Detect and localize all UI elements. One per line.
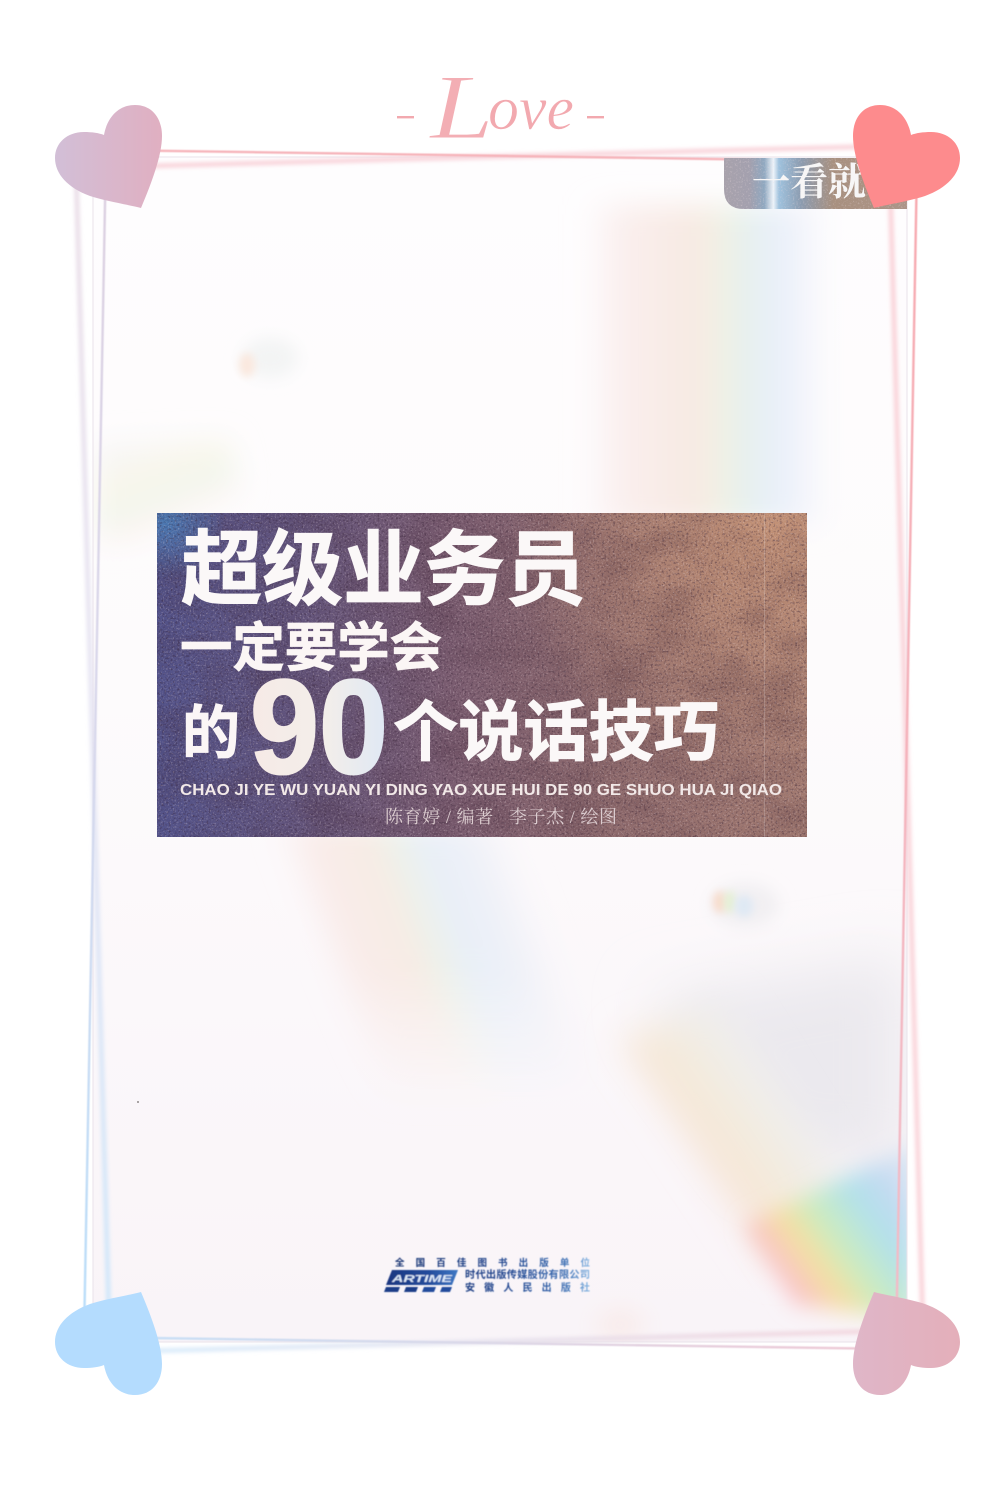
icon: heart bottom right <box>853 1292 960 1395</box>
authors: 陈育婷 / 编著 李子杰 / 绘图 <box>385 807 617 827</box>
blurred tilted frame <box>76 146 923 1352</box>
icon: heart top right <box>853 105 960 208</box>
corner tab: fragment of cover text <box>724 158 907 209</box>
heading: Love <box>397 56 604 158</box>
heading: Love: ove <box>488 75 574 143</box>
cover title background <box>157 513 807 837</box>
publisher name 2: 安徽人民出版社 <box>465 1281 590 1294</box>
publisher slogan: 全国百佳图书出版单位 <box>395 1257 590 1269</box>
publisher logo: ARTIME <box>390 1274 453 1285</box>
icon: heart bottom left <box>55 1292 162 1395</box>
publisher name 1: 时代出版传媒股份有限公司 <box>465 1268 590 1281</box>
title line 3: 的 <box>182 701 240 766</box>
book title block <box>157 513 807 837</box>
title line 3: 90 <box>250 653 388 802</box>
frosted panel with rainbow light <box>93 157 915 1342</box>
publisher mark <box>384 1257 590 1294</box>
publisher logo <box>384 1270 458 1292</box>
corner tab: fragment of cover text: 一看就 <box>752 162 866 204</box>
solid tilted frame <box>84 150 917 1349</box>
title line 3: 个说话技巧 <box>393 695 719 769</box>
panel thin outline <box>93 157 907 1342</box>
icon: heart top left <box>55 105 162 208</box>
title line 3 <box>182 653 719 802</box>
pinyin line: CHAO JI YE WU YUAN YI DING YAO XUE HUI DE 90 GE SHUO HUA JI QIAO <box>180 782 782 799</box>
title line 2: 一定要学会 <box>180 619 442 678</box>
heading: Love: L <box>427 56 494 158</box>
title line 1: 超级业务员 <box>181 525 586 616</box>
